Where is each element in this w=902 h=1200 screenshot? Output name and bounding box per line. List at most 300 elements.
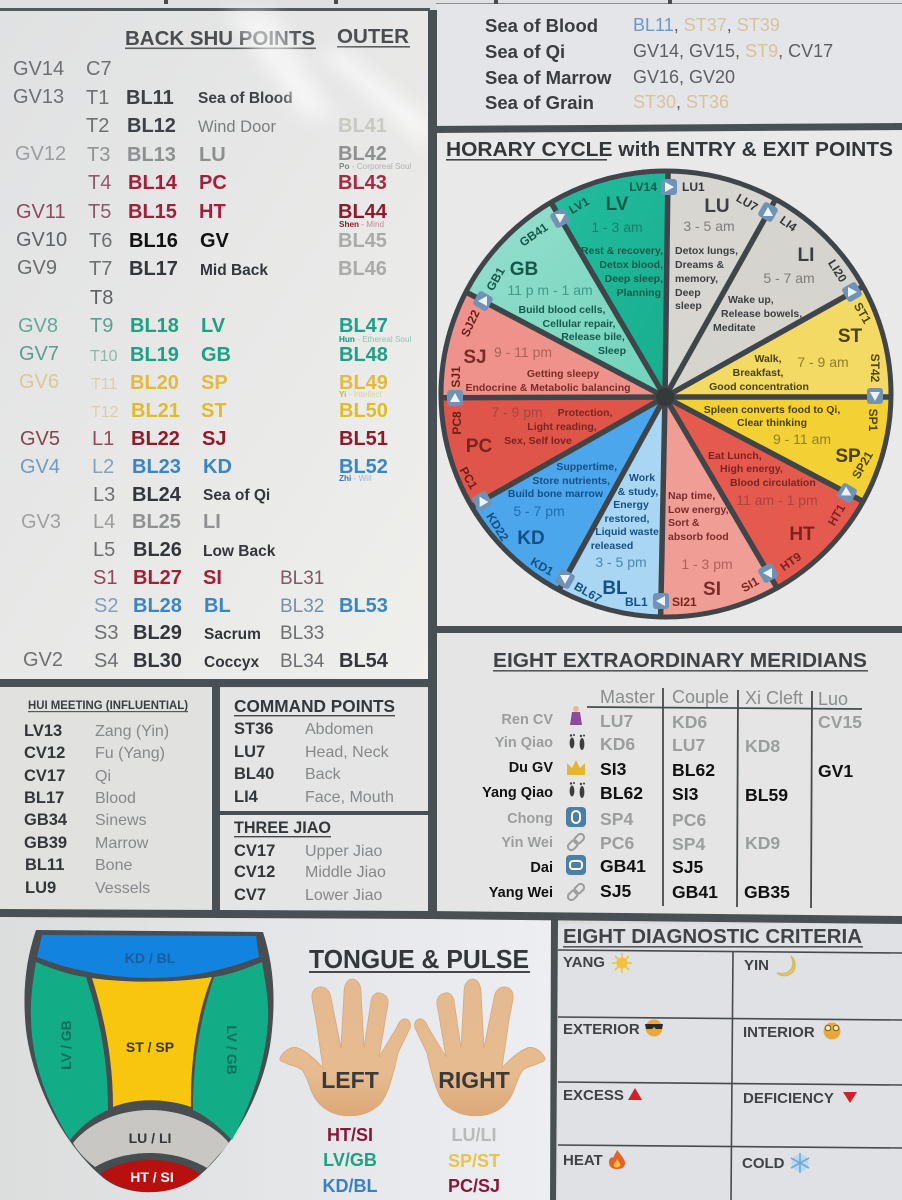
column: back shu points: BL11 (126, 87, 174, 109)
three jiao codes (234, 842, 275, 904)
meridian names: Yin Wei (501, 835, 553, 851)
hui points: CV12 (24, 744, 65, 762)
column: governing vessel points: GV14 (13, 58, 64, 80)
column: outer points: BL45 (338, 230, 387, 252)
couple points column: SJ5 (672, 857, 704, 877)
segment LV: Detox blood, (599, 259, 663, 271)
segment LI: Release bowels, (721, 308, 802, 320)
segment SP: 9 - 11 am (773, 431, 831, 447)
segment LV: Rest & recovery, (581, 245, 663, 257)
segment SJ: 9 - 11 pm (494, 344, 552, 360)
heading: eight extraordinary meridians: EIGHT EXTRAORDINARY MERIDIANS (493, 649, 867, 672)
column: vertebrae: T1 (86, 87, 109, 109)
heading: command points: COMMAND POINTS (234, 696, 395, 716)
column: governing vessel points: GV7 (19, 343, 59, 365)
segment ST: Breakfast, (733, 367, 783, 379)
column: organ and function names: SJ (202, 428, 226, 450)
xi cleft points column: GB35 (744, 882, 790, 902)
left pulse positions: KD/BL (322, 1176, 378, 1196)
column: back shu points: BL26 (133, 539, 182, 561)
criterion: heat: HEAT (563, 1152, 603, 1169)
segment BL: & study, (618, 486, 658, 498)
command point codes: ST36 (234, 720, 273, 738)
column: sacral foramina points: BL31 (280, 568, 324, 589)
segment PC: PC (466, 436, 492, 457)
column: vertebrae: T3 (87, 144, 110, 166)
segment LI (713, 245, 815, 334)
notes: spirit labels: Shen - Mind (339, 220, 384, 229)
segment SJ: Getting sleepy (527, 368, 599, 380)
label: left: LEFT (321, 1067, 379, 1093)
column: vertebrae: L3 (93, 484, 115, 506)
column: organ and function names: Sea of Qi (203, 487, 270, 504)
table headers: Master (600, 687, 655, 707)
hui points: BL17 (24, 789, 64, 807)
column: back shu points: BL12 (127, 115, 176, 137)
hui influences: Zang (Yin) (95, 723, 169, 740)
column: vertebrae: T6 (89, 230, 112, 252)
segment SP: SP (835, 446, 861, 467)
list: sea points: ST30, ST36 (633, 92, 729, 112)
column: outer points: BL53 (339, 595, 388, 617)
table headers: Xi Cleft (745, 688, 803, 708)
criterion: yang: YANG (563, 954, 605, 971)
column: outer points: BL50 (339, 400, 388, 422)
segment LU: LU (704, 196, 730, 217)
couple points column: SP4 (672, 834, 705, 854)
point labels around the rim: KD1 (528, 554, 556, 579)
couple points column: KD6 (672, 712, 707, 732)
column: outer points: BL52 (339, 456, 388, 478)
segment KD: Suppertime, (556, 461, 617, 473)
point labels around the rim: LV14 (629, 180, 657, 194)
panel: three jiao (220, 815, 428, 911)
column: sacral foramina points (280, 568, 325, 672)
segment SI (668, 490, 733, 600)
column: organ and function names: Sea of Blood (198, 90, 293, 107)
segment KD: Store nutrients, (532, 475, 610, 487)
segment BL: BL (602, 578, 628, 599)
column: back shu points: BL24 (132, 484, 182, 506)
three jiao regions: Lower Jiao (305, 887, 382, 904)
couple points column: BL62 (672, 760, 715, 780)
column: outer points: BL54 (339, 650, 389, 672)
notes: spirit labels: Hun - Ethereal Soul (339, 335, 412, 344)
column: organ and function names: GB (201, 344, 231, 366)
luo points column: CV15 (818, 712, 862, 732)
column: organ and function names: Mid Back (200, 262, 268, 279)
criterion: yin: YIN (744, 957, 769, 974)
segment BL: released (591, 540, 633, 552)
wedges (444, 174, 888, 614)
point labels around the rim: SP1 (866, 409, 880, 432)
point labels around the rim: ST1 (851, 300, 874, 326)
segment SI: Sort & (668, 517, 700, 529)
column: governing vessel points: GV11 (16, 201, 66, 223)
column: back shu points: BL19 (130, 344, 179, 366)
heading: back shu points: BACK SHU POINTS (125, 28, 315, 50)
segment PC (466, 404, 612, 457)
column: organ and function names: Low Back (203, 543, 276, 560)
segment LI: 5 - 7 am (763, 270, 815, 286)
criterion: yang (563, 953, 632, 973)
column: vertebrae: T10 (90, 348, 118, 365)
segment SP (704, 404, 861, 467)
heading: three jiao: THREE JIAO (234, 819, 331, 837)
column: back shu points: BL21 (131, 400, 180, 422)
column: vertebrae: T5 (88, 201, 111, 223)
hui points: GB39 (24, 834, 67, 852)
column: vertebrae: T4 (88, 172, 111, 194)
master points column (600, 711, 646, 901)
table headers (600, 687, 848, 709)
segment BL: Energy (613, 499, 649, 511)
criterion: heat (563, 1150, 625, 1169)
column: organ and function names: SI (203, 567, 222, 589)
column: governing vessel points: GV5 (20, 428, 60, 450)
notes: spirit labels: Yi - Intellect (339, 390, 383, 399)
column: vertebrae: T8 (90, 287, 113, 309)
column: organ and function names: SP (201, 372, 228, 394)
column: governing vessel points: GV6 (19, 371, 59, 393)
column: back shu points: BL27 (133, 567, 182, 589)
meridian names (482, 712, 553, 901)
column: outer points (338, 115, 389, 672)
segment ST (709, 326, 863, 393)
segment LV: LV (606, 194, 629, 215)
column: organ and function names: ST (201, 400, 227, 422)
segment LI: Meditate (713, 322, 756, 334)
tongue labels (58, 950, 240, 1185)
column: organ and function names: Wind Door (198, 118, 276, 136)
point labels around the rim (449, 180, 882, 609)
column: vertebrae: S2 (94, 595, 118, 617)
segment HT: Eat Lunch, (708, 450, 762, 462)
command point codes: LU7 (234, 743, 265, 761)
criterion: excess: EXCESS (563, 1087, 624, 1104)
point labels around the rim: HT9 (777, 549, 804, 574)
column: outer points: BL41 (338, 115, 387, 137)
column: vertebrae: S1 (93, 567, 117, 589)
icon: left hand (280, 979, 410, 1116)
segment HT: Blood circulation (730, 477, 816, 489)
hui points: GB34 (24, 811, 68, 829)
hui influences (95, 723, 169, 897)
master points column: LU7 (600, 711, 633, 731)
column: governing vessel points: GV8 (18, 315, 58, 337)
meridian icons (566, 706, 586, 902)
master points column: SJ5 (600, 881, 632, 901)
left pulse positions: HT/SI (327, 1125, 373, 1145)
criterion: cold (742, 1153, 809, 1173)
criterion: exterior: EXTERIOR (563, 1021, 640, 1038)
column: back shu points: BL14 (128, 172, 178, 194)
point labels around the rim: SP21 (849, 449, 876, 481)
column: organ and function names: KD (203, 456, 232, 478)
hui influences: Vessels (95, 880, 150, 897)
segment PC: Sex, Self love (504, 435, 572, 447)
column: back shu points: BL23 (132, 456, 181, 478)
segment SP: Clear thinking (737, 417, 807, 429)
column: vertebrae: L2 (92, 456, 114, 478)
segment SJ: SJ (463, 347, 487, 368)
list: sea points: BL11, ST37, ST39 (633, 15, 780, 35)
segment LI: LI (798, 245, 814, 266)
column: back shu points: BL18 (130, 315, 179, 337)
tongue labels: LV / GB (224, 1025, 240, 1075)
segment BL: Work (629, 472, 655, 484)
segment LU: Dreams & (675, 259, 724, 271)
segment GB: Cellular repair, (543, 318, 616, 330)
panel: command points (220, 688, 428, 811)
meridian names: Yin Qiao (495, 735, 553, 751)
segment SJ: Endocrine & Metabolic balancing (465, 382, 631, 394)
right pulse positions (448, 1125, 500, 1196)
hui points: CV17 (24, 767, 65, 785)
heading: horary cycle: HORARY CYCLE with ENTRY & EXIT POINTS (446, 138, 893, 161)
column: vertebrae: L1 (92, 428, 114, 450)
point labels around the rim: SI1 (739, 574, 762, 595)
hui points: BL11 (25, 856, 64, 874)
segment GB: 11 p m - 1 am (507, 282, 593, 298)
column: vertebrae: T12 (91, 404, 119, 421)
meridian names: Du GV (509, 760, 553, 776)
list: sea names: Sea of Qi (485, 41, 565, 62)
segment SI: Low energy, (668, 504, 729, 516)
couple points column: GB41 (672, 882, 718, 902)
three jiao codes: CV12 (234, 863, 275, 881)
tongue labels: ST / SP (126, 1039, 174, 1055)
point labels around the rim: GB1 (483, 265, 508, 293)
column: outer points: BL46 (338, 258, 387, 280)
column: outer points: BL42 (338, 143, 387, 165)
segment LU: Detox lungs, (675, 245, 738, 257)
three jiao regions: Middle Jiao (305, 864, 386, 881)
hui influences: Blood (95, 790, 136, 807)
notes: spirit labels (339, 162, 412, 483)
column: back shu points: BL16 (129, 230, 178, 252)
meridian names: Yang Wei (489, 885, 553, 901)
command point regions: Head, Neck (305, 744, 390, 761)
column: vertebrae: T7 (89, 258, 112, 280)
segment GB: Release bile, (561, 331, 625, 343)
table rules (587, 688, 862, 908)
couple points column: PC6 (672, 810, 706, 830)
master points column: GB41 (600, 856, 646, 876)
hui influences: Sinews (95, 812, 147, 829)
point labels around the rim: LI20 (825, 257, 850, 285)
segment SJ (463, 344, 631, 394)
column: governing vessel points: GV10 (16, 229, 67, 251)
panel: top edge strip (0, 0, 902, 11)
column: organ and function names: PC (199, 172, 227, 194)
segment HT (708, 450, 818, 545)
master points column: SI3 (600, 759, 627, 779)
segment LV: Planning (617, 287, 661, 299)
column: sacral foramina points: BL34 (280, 651, 325, 672)
segment SI: absorb food (668, 531, 729, 543)
point labels around the rim: SJ22 (458, 307, 483, 339)
xi cleft points column: KD8 (745, 736, 780, 756)
three jiao regions (305, 843, 386, 904)
panel: hui meeting points (0, 686, 212, 910)
segment KD: 5 - 7 pm (513, 503, 565, 519)
criterion: interior (743, 1022, 840, 1041)
column: back shu points: BL15 (128, 201, 177, 223)
list: sea names (485, 15, 612, 113)
column: back shu points: BL17 (129, 258, 178, 280)
segment ST: Good concentration (709, 381, 809, 393)
segment ST: ST (838, 326, 863, 347)
column: vertebrae: C7 (86, 58, 112, 80)
heading: tongue and pulse: TONGUE & PULSE (309, 944, 529, 974)
segment LV: Deep sleep, (605, 273, 663, 285)
segment ST: Walk, (754, 353, 782, 365)
chart: horary wheel (438, 168, 894, 620)
label: right: RIGHT (438, 1067, 510, 1093)
column: back shu points (126, 87, 182, 672)
column: governing vessel points: GV12 (15, 143, 66, 165)
hui influences: Bone (95, 857, 132, 874)
command point regions: Abdomen (305, 721, 374, 738)
hui points (24, 722, 68, 897)
criterion: deficiency: DEFICIENCY (743, 1090, 834, 1107)
segment LU (675, 196, 738, 312)
segment BL: Liquid waste (595, 526, 659, 538)
master points column: PC6 (600, 833, 634, 853)
segment LI: Wake up, (728, 294, 774, 306)
panel: four seas (436, 4, 902, 125)
segment KD: KD (517, 528, 545, 549)
left pulse positions (322, 1125, 378, 1196)
column: organ and function names: LU (199, 144, 226, 166)
column: vertebrae: T11 (91, 376, 117, 393)
heading: eight diagnostic criteria: EIGHT DIAGNOSTIC CRITERIA (563, 926, 862, 948)
segment SP: Spleen converts food to Qi, (704, 404, 840, 416)
column: vertebrae: S3 (94, 622, 118, 644)
segment GB: Build blood cells, (519, 304, 606, 316)
column: vertebrae: S4 (94, 650, 118, 672)
luo points column: GV1 (818, 761, 853, 781)
column: organ and function names: LV (201, 315, 226, 337)
column: back shu points: BL29 (133, 622, 182, 644)
column: outer points: BL44 (338, 201, 388, 223)
hui points: LU9 (25, 879, 56, 897)
xi cleft points column: BL59 (745, 785, 788, 805)
criterion: yin (744, 956, 795, 976)
column: back shu points: BL13 (127, 144, 176, 166)
column: organ and function names: Sacrum (204, 626, 261, 643)
meridian names: Dai (530, 860, 553, 876)
segment LU: memory, (675, 273, 718, 285)
right pulse positions: LU/LI (452, 1125, 496, 1145)
column: governing vessel points (13, 58, 67, 671)
column: governing vessel points: GV2 (23, 649, 63, 671)
point labels around the rim: SJ1 (449, 366, 463, 388)
list: sea names: Sea of Grain (485, 92, 594, 113)
segment LU: sleep (675, 300, 702, 312)
tongue labels: HT / SI (130, 1169, 174, 1185)
column: back shu points: BL20 (130, 372, 179, 394)
master points column: KD6 (600, 734, 635, 754)
point labels around the rim: KD22 (483, 510, 512, 544)
segment KD: Build bone marrow (508, 488, 604, 500)
glare reflection (225, 11, 428, 150)
segment GB: GB (510, 259, 538, 280)
panel: horary cycle (437, 130, 902, 626)
master points column: SP4 (600, 809, 633, 829)
column: governing vessel points: GV3 (21, 511, 61, 533)
list: sea names: Sea of Blood (485, 15, 598, 36)
command point codes: LI4 (234, 788, 259, 806)
notes: spirit labels: Zhi - Will (339, 474, 372, 483)
table headers: Couple (672, 687, 729, 707)
column: governing vessel points: GV13 (13, 86, 64, 108)
luo points column (818, 712, 862, 781)
point labels around the rim: LI4 (777, 213, 800, 235)
column: vertebrae (86, 58, 119, 672)
segment KD (508, 461, 617, 549)
point labels around the rim: LU1 (682, 180, 705, 194)
panel: back shu points (0, 11, 428, 679)
couple points column: LU7 (672, 735, 705, 755)
column: back shu points: BL28 (133, 595, 182, 617)
column: vertebrae: T9 (90, 315, 113, 337)
right pulse positions: PC/SJ (448, 1176, 500, 1196)
panel: tongue and pulse (0, 917, 552, 1200)
point labels around the rim: HT1 (825, 501, 848, 528)
segment BL: 3 - 5 pm (595, 554, 647, 570)
command point codes (234, 720, 274, 806)
column: outer points: BL43 (338, 172, 387, 194)
column: sacral foramina points: BL33 (280, 623, 324, 644)
column: organ and function names: Coccyx (204, 654, 260, 671)
meridian names: Yang Qiao (482, 785, 553, 801)
column: back shu points: BL30 (133, 650, 182, 672)
point labels around the rim: SI21 (672, 595, 697, 609)
column: governing vessel points: GV4 (20, 456, 60, 478)
column: organ and function names: BL (204, 595, 231, 617)
column: outer points: BL51 (339, 428, 388, 450)
point labels around the rim: LV1 (566, 194, 592, 217)
panel: eight extraordinary meridians (436, 632, 902, 916)
column: governing vessel points: GV9 (17, 257, 57, 279)
point labels around the rim: BL67 (572, 579, 604, 606)
column: organ and function names: LI (203, 511, 221, 533)
three jiao regions: Upper Jiao (305, 843, 382, 860)
master points column: BL62 (600, 783, 643, 803)
segment GB: Sleep (598, 345, 626, 357)
table headers: Luo (818, 689, 848, 709)
segment SI: Nap time, (668, 490, 715, 502)
segment ST: 7 - 9 am (797, 354, 849, 370)
segment BL (591, 472, 659, 599)
list: sea points: GV16, GV20 (633, 67, 735, 87)
column: back shu points: BL25 (132, 511, 181, 533)
meridian names: Chong (507, 811, 553, 827)
column: vertebrae: L4 (93, 511, 115, 533)
icon: right hand (415, 979, 545, 1116)
column: back shu points: BL22 (131, 428, 180, 450)
xi cleft points column (744, 736, 790, 902)
three jiao codes: CV7 (234, 886, 266, 904)
point labels around the rim: PC8 (450, 411, 464, 435)
list: sea names: Sea of Marrow (485, 67, 612, 88)
notes: spirit labels: Po - Corporeal Soul (339, 162, 412, 171)
segment LU: 3 - 5 am (683, 218, 735, 234)
heading: outer: OUTER (337, 26, 410, 48)
grid lines (558, 950, 902, 1200)
